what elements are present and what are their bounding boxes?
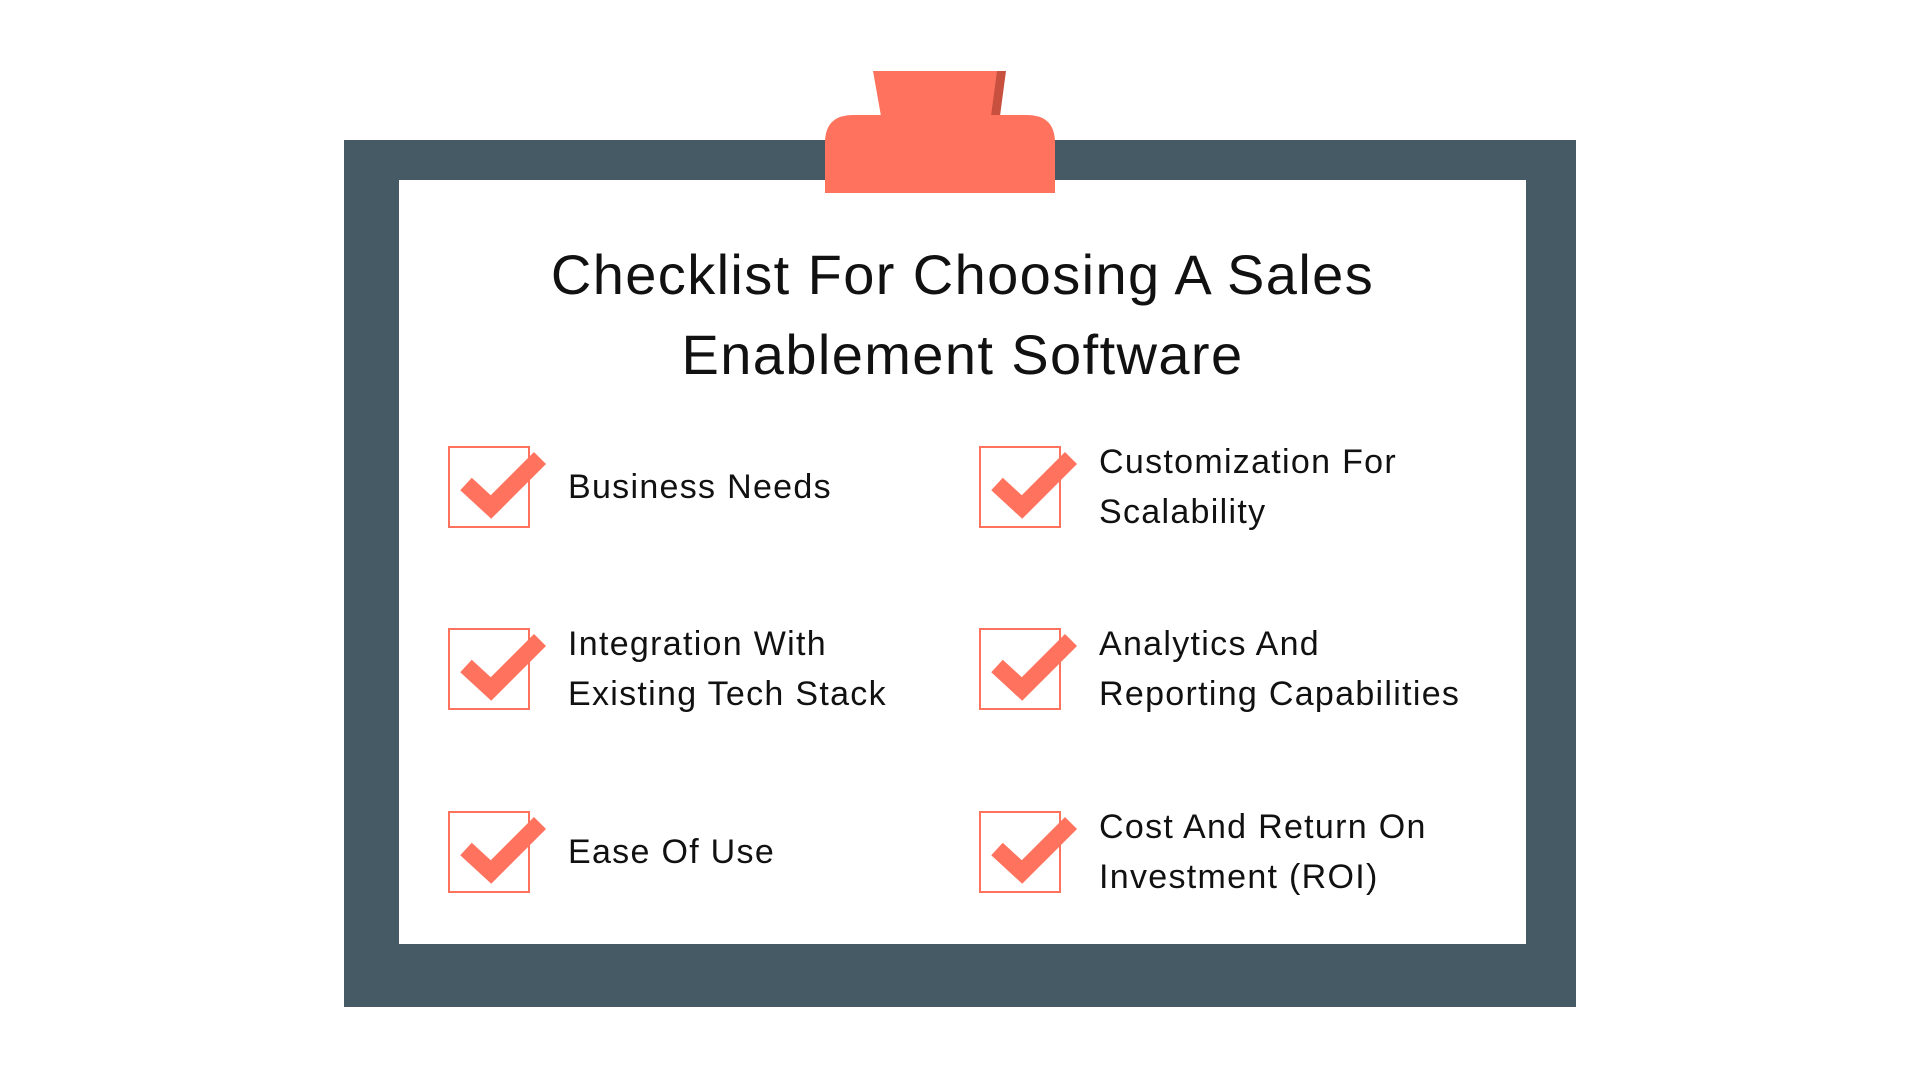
item: Customization: Scalability [1099,493,1266,531]
item: Ease Of Use [448,811,775,893]
item: Customization [979,443,1397,531]
item: Analytics: Reporting Capabilities [1099,675,1460,713]
clip [825,71,1055,193]
item: Analytics: Analytics And [1099,625,1320,663]
item: Integration: Integration With [568,625,827,663]
clipboard frame [344,140,1576,1007]
item: Cost: Cost And Return On [1099,808,1427,846]
item: Integration [448,625,887,713]
title: Enablement Software [681,323,1244,386]
item: Cost: Investment (ROI) [1099,858,1379,896]
item: Analytics [979,625,1460,713]
item: Business Needs [448,446,832,528]
item: Integration: Existing Tech Stack [568,675,887,713]
title [551,243,1374,386]
title: Checklist For Choosing A Sales [551,243,1374,306]
item: Business Needs: Business Needs [568,468,832,506]
item: Cost [979,808,1427,896]
checklist items [448,443,1460,896]
item: Ease Of Use: Ease Of Use [568,833,775,871]
paper [399,180,1526,944]
item: Customization: Customization For [1099,443,1397,481]
